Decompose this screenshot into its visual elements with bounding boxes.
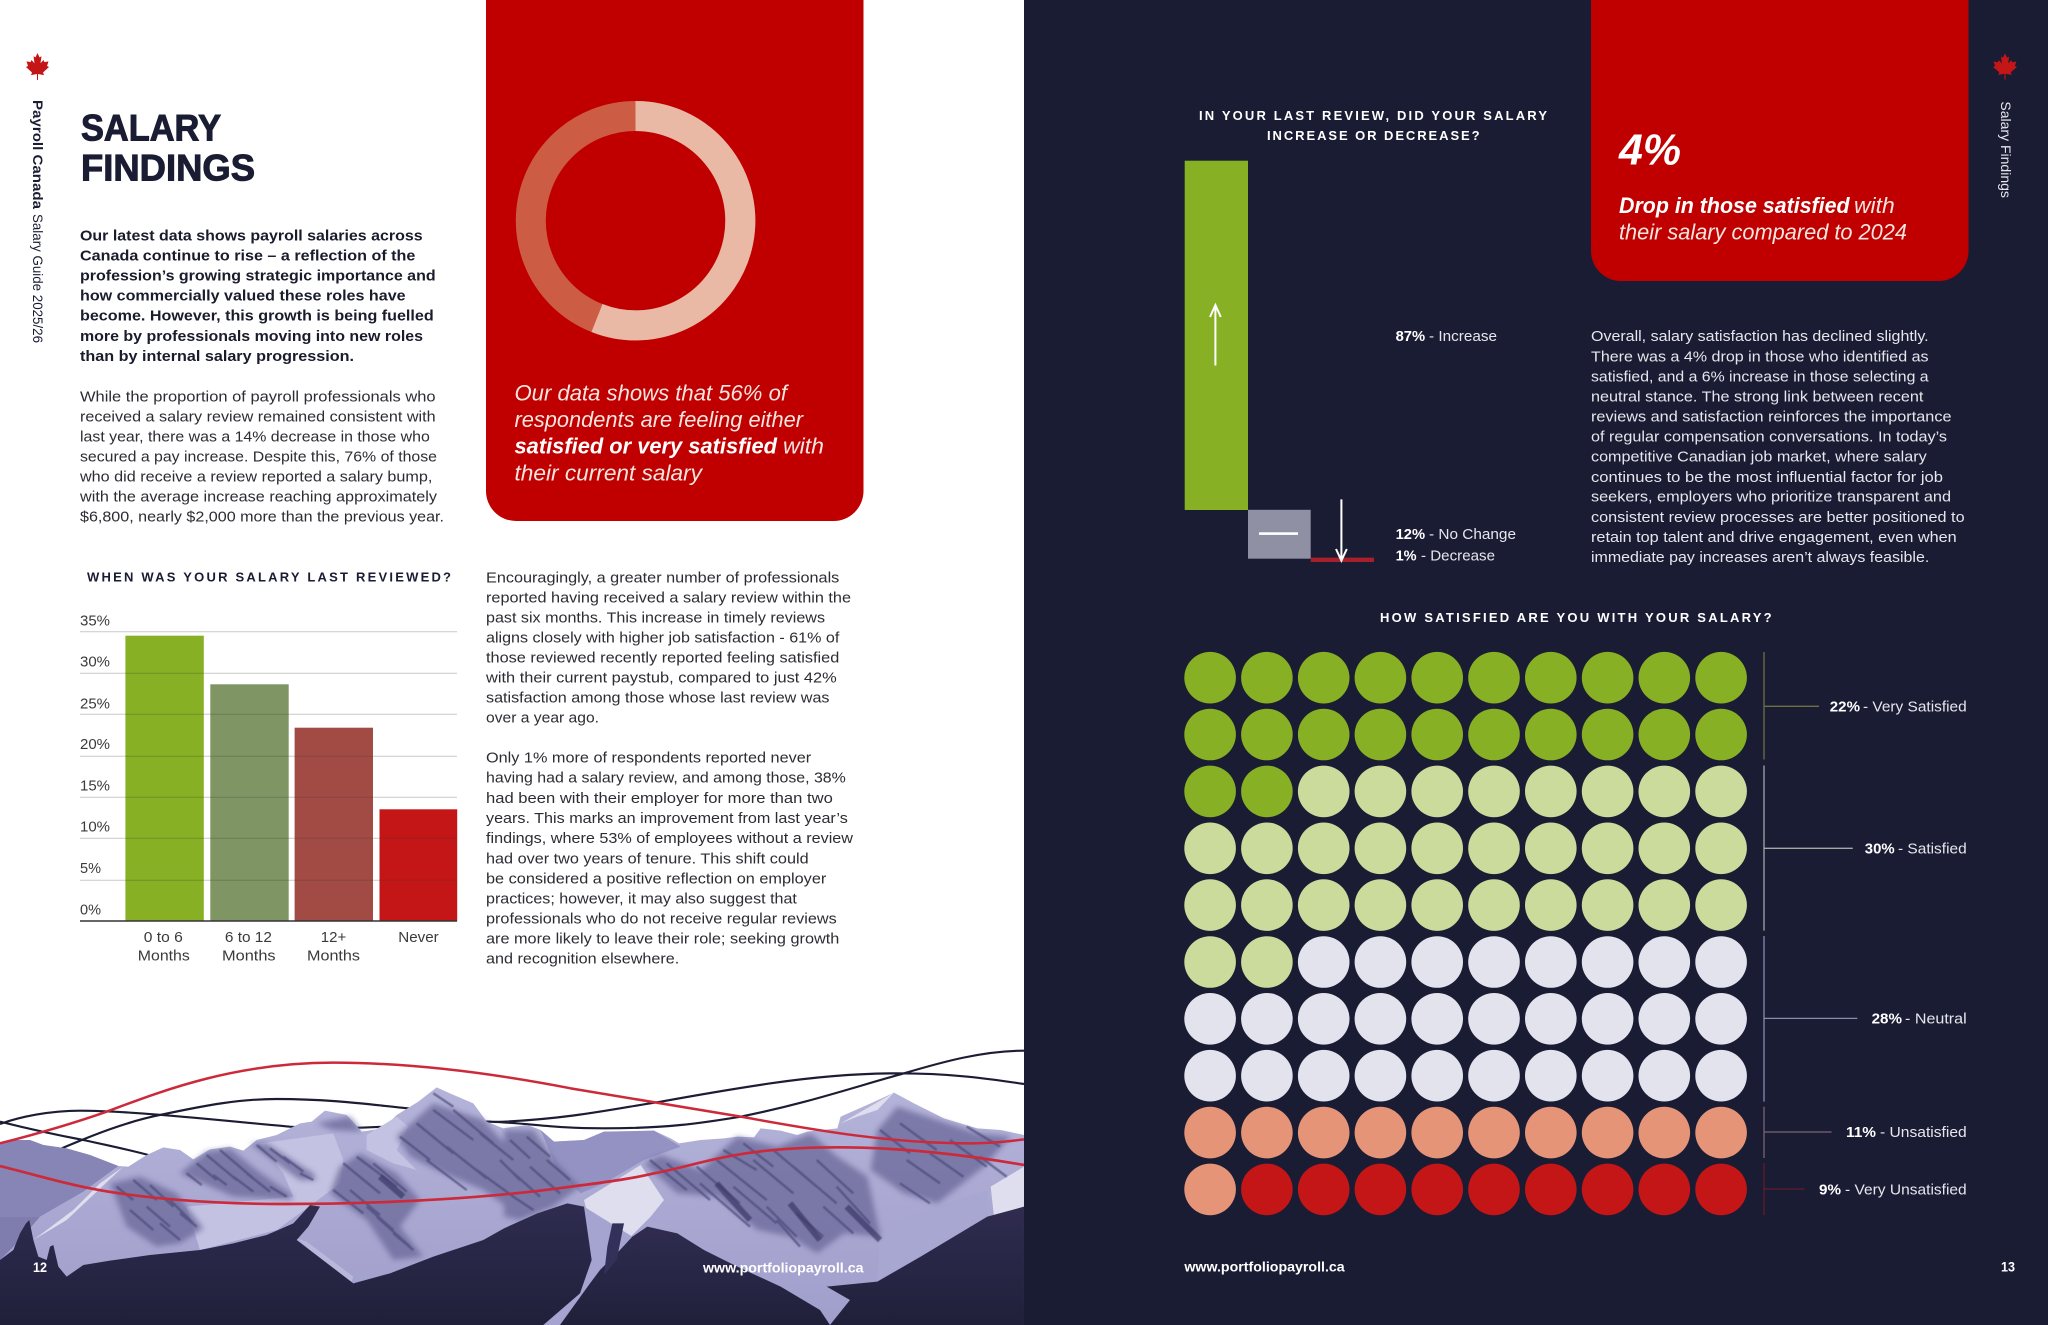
running header left: Salary Guide 2025/26 bbox=[30, 214, 45, 343]
text block: reviews paragraph one: aligns closely with higher job satisfaction - 61% of bbox=[486, 629, 840, 646]
text block: overall satisfaction: of regular compensation conversations. In today’s bbox=[1591, 429, 1947, 446]
text block: intro bold: more by professionals moving into new roles bbox=[80, 328, 423, 345]
bracket: unsatisfied bbox=[1764, 1107, 1832, 1158]
text block: reviews paragraph two: had over two years of tenure. This shift could bbox=[486, 850, 809, 867]
callout text: satisfied or very satisfied bbox=[514, 434, 778, 459]
text block: reviews paragraph one: over a year ago. bbox=[486, 710, 599, 727]
text block: overall satisfaction: satisfied, and a 6% increase in those selecting a bbox=[1591, 369, 1929, 386]
text block: overall satisfaction: competitive Canadian job market, where salary bbox=[1591, 449, 1927, 466]
icon: maple leaf left bbox=[26, 53, 49, 80]
callout text: their current salary bbox=[514, 460, 704, 486]
legend: very unsatisfied: - Very Unsatisfied bbox=[1845, 1181, 1967, 1198]
text block: intro body: secured a pay increase. Despite this, 76% of those bbox=[80, 448, 437, 465]
panel: 4 percent callout bbox=[1591, 0, 1968, 281]
legend: satisfied: 30% bbox=[1865, 840, 1895, 857]
bracket: very unsatisfied bbox=[1764, 1163, 1805, 1215]
text block: overall satisfaction: consistent review processes are better positioned to bbox=[1591, 509, 1965, 526]
icon: maple leaf right bbox=[1993, 54, 2017, 80]
bar chart: salary last reviewed: 25% bbox=[80, 696, 110, 712]
bar chart: salary last reviewed: 30% bbox=[80, 654, 110, 670]
text block: overall satisfaction: neutral stance. The strong link between recent bbox=[1591, 388, 1924, 406]
text block: overall satisfaction bbox=[1591, 328, 1965, 566]
callout text: respondents are feeling either bbox=[514, 407, 805, 432]
footer right bbox=[1183, 1260, 2015, 1274]
text block: reviews paragraph two: findings, where 53% of employees without a review bbox=[486, 830, 853, 847]
text block: overall satisfaction: continues to be the most influential factor for job bbox=[1591, 469, 1943, 486]
text block: reviews paragraph two: had been with their employer for more than two bbox=[486, 790, 833, 807]
bar chart: salary last reviewed: 5% bbox=[80, 861, 101, 877]
heading: how satisfied: HOW SATISFIED ARE YOU WITH YOUR SALARY? bbox=[1380, 610, 1773, 625]
text block: reviews paragraph two: years. This marks an improvement from last year’s bbox=[486, 810, 848, 827]
callout text bbox=[514, 380, 824, 486]
bar chart: salary last reviewed bbox=[80, 614, 457, 964]
bar: no change bbox=[1248, 510, 1311, 559]
legend: unsatisfied: 11% bbox=[1846, 1124, 1876, 1141]
text block: overall satisfaction: There was a 4% drop in those who identified as bbox=[1591, 348, 1929, 365]
bar chart: salary last reviewed: 0 to 6 bbox=[144, 930, 183, 946]
text block: reviews paragraph one: with their current paystub, compared to just 42% bbox=[485, 670, 837, 687]
legend: neutral bbox=[1872, 1010, 1967, 1027]
text block: intro bold: profession’s growing strategic importance and bbox=[80, 268, 436, 284]
running header right: Salary Findings bbox=[1998, 101, 2013, 198]
running header left bbox=[30, 100, 45, 343]
bracket: neutral bbox=[1764, 936, 1857, 1102]
dots: very satisfied 22 bbox=[1184, 652, 1747, 817]
bar chart: salary last reviewed: 10% bbox=[80, 820, 110, 836]
callout text: Our data shows that 56% of bbox=[514, 380, 790, 406]
text block: reviews paragraph two bbox=[486, 750, 853, 967]
heading: salary last reviewed: WHEN WAS YOUR SALARY LAST REVIEWED? bbox=[87, 570, 452, 584]
bar chart: salary last reviewed: Never bbox=[398, 930, 439, 946]
donut chart: 56 percent bbox=[531, 116, 740, 325]
text block: intro bold: how commercially valued these roles have bbox=[80, 288, 406, 304]
text block: intro body: with the average increase reaching approximately bbox=[79, 489, 438, 506]
text block: reviews paragraph one bbox=[485, 569, 851, 727]
bar chart: salary last reviewed: 20% bbox=[80, 737, 110, 753]
text block: intro body: $6,800, nearly $2,000 more than the previous year. bbox=[80, 509, 444, 526]
chart labels bbox=[1396, 328, 1516, 564]
legend: very unsatisfied: 9% bbox=[1819, 1181, 1841, 1198]
icon: minus bbox=[1259, 532, 1298, 535]
legend: satisfied: - Satisfied bbox=[1898, 840, 1967, 857]
chart labels: - No Change bbox=[1429, 526, 1516, 543]
callout text: with bbox=[1854, 193, 1895, 218]
running header left: Payroll Canada bbox=[30, 100, 45, 210]
bar: increase bbox=[1185, 161, 1248, 510]
bar: decrease bbox=[1311, 558, 1374, 562]
text block: overall satisfaction: immediate pay increases aren’t always feasible. bbox=[1591, 549, 1929, 566]
chart labels: 12% bbox=[1396, 526, 1425, 543]
title bbox=[81, 108, 255, 188]
bar chart: salary last reviewed: 15% bbox=[80, 778, 110, 794]
chart labels: - Decrease bbox=[1421, 547, 1495, 564]
text block: reviews paragraph one: satisfaction among those whose last review was bbox=[486, 690, 830, 707]
text block: intro bold bbox=[80, 228, 436, 365]
bar chart: salary last reviewed: Months bbox=[138, 948, 190, 964]
callout text: Drop in those satisfied bbox=[1619, 193, 1850, 218]
chart labels: - Increase bbox=[1429, 328, 1497, 345]
text block: reviews paragraph two: are more likely to leave their role; seeking growth bbox=[486, 930, 839, 947]
dots: neutral 28 bbox=[1184, 936, 1747, 1101]
heading: salary increase or decrease: IN YOUR LAST REVIEW, DID YOUR SALARY bbox=[1199, 108, 1548, 123]
legend: unsatisfied: - Unsatisfied bbox=[1880, 1124, 1967, 1141]
bracket: satisfied bbox=[1764, 766, 1853, 931]
brackets and legend: satisfaction bbox=[1764, 652, 1967, 1215]
panel: satisfaction callout bbox=[486, 0, 864, 521]
right page background bbox=[1024, 0, 2048, 1325]
dots: satisfied 30 bbox=[1184, 766, 1747, 988]
text block: reviews paragraph two: be considered a positive reflection on employer bbox=[486, 870, 826, 887]
bar chart: salary last reviewed: 12+ bbox=[321, 930, 346, 946]
heading: salary increase or decrease bbox=[1199, 108, 1548, 143]
left page background bbox=[0, 0, 1024, 1325]
text block: reviews paragraph one: past six months. This increase in timely reviews bbox=[486, 609, 825, 626]
title: FINDINGS bbox=[81, 148, 255, 188]
text block: intro bold: Our latest data shows payroll salaries across bbox=[80, 228, 423, 244]
callout text: their salary compared to 2024 bbox=[1619, 220, 1907, 245]
text block: reviews paragraph two: having had a salary review, and among those, 38% bbox=[486, 770, 846, 787]
bar chart: salary last reviewed: Months bbox=[307, 948, 360, 964]
text block: overall satisfaction: retain top talent and drive engagement, even when bbox=[1591, 529, 1957, 546]
icon: up arrow bbox=[1210, 305, 1221, 366]
text block: reviews paragraph one: Encouragingly, a greater number of professionals bbox=[486, 569, 839, 586]
callout text: with bbox=[783, 434, 824, 459]
chart: salary change staircase bbox=[1185, 161, 1374, 562]
text block: reviews paragraph two: professionals who do not receive regular reviews bbox=[486, 910, 837, 927]
text block: reviews paragraph two: and recognition elsewhere. bbox=[486, 950, 679, 967]
legend: satisfied bbox=[1865, 840, 1967, 857]
text block: intro body: last year, there was a 14% decrease in those who bbox=[80, 428, 430, 445]
legend: neutral: 28% bbox=[1872, 1010, 1902, 1027]
legend: neutral: - Neutral bbox=[1905, 1010, 1967, 1027]
chart: satisfaction dot grid bbox=[1184, 652, 1747, 1215]
text block: overall satisfaction: Overall, salary satisfaction has declined slightly. bbox=[1591, 328, 1929, 345]
footer left: www.portfoliopayroll.ca bbox=[702, 1260, 864, 1276]
chart labels: 1% bbox=[1396, 547, 1417, 564]
legend: unsatisfied bbox=[1846, 1124, 1967, 1141]
legend: very satisfied: 22% bbox=[1830, 698, 1860, 715]
text block: intro bold: become. However, this growth is being fuelled bbox=[80, 308, 434, 325]
text block: overall satisfaction: seekers, employers who prioritize transparent and bbox=[1591, 489, 1951, 506]
text block: intro body: While the proportion of payroll professionals who bbox=[80, 388, 436, 405]
text block: reviews paragraph two: Only 1% more of respondents reported never bbox=[486, 750, 811, 767]
dots: unsatisfied 11 bbox=[1184, 1107, 1747, 1215]
text block: reviews paragraph two: practices; however, it may also suggest that bbox=[486, 890, 798, 907]
footer left: 12 bbox=[33, 1260, 47, 1275]
footer right: 13 bbox=[2001, 1260, 2015, 1274]
stat: 4% bbox=[1618, 126, 1681, 175]
bar chart: salary last reviewed: 0% bbox=[80, 902, 101, 918]
legend: very satisfied: - Very Satisfied bbox=[1863, 698, 1967, 715]
bar chart: salary last reviewed: 35% bbox=[80, 614, 110, 630]
text block: intro body: received a salary review remained consistent with bbox=[80, 408, 436, 425]
chart labels: 87% bbox=[1396, 328, 1425, 345]
bar chart: salary last reviewed: 6 to 12 bbox=[225, 930, 272, 946]
text block: reviews paragraph one: those reviewed recently reported feeling satisfied bbox=[486, 649, 839, 666]
text block: intro bold: than by internal salary progression. bbox=[80, 348, 354, 365]
footer left bbox=[33, 1260, 864, 1276]
text block: overall satisfaction: reviews and satisfaction reinforces the importance bbox=[1591, 408, 1952, 425]
text block: intro bold: Canada continue to rise – a reflection of the bbox=[80, 248, 415, 264]
callout text bbox=[1619, 193, 1907, 245]
bar chart: salary last reviewed: Months bbox=[222, 948, 276, 964]
heading: salary increase or decrease: INCREASE OR DECREASE? bbox=[1267, 128, 1481, 143]
bracket: very satisfied bbox=[1764, 652, 1819, 760]
dots: very unsatisfied 9 bbox=[1241, 1164, 1747, 1215]
footer right: www.portfoliopayroll.ca bbox=[1183, 1260, 1345, 1274]
text block: reviews paragraph one: reported having received a salary review within the bbox=[486, 589, 851, 606]
text block: intro body: who did receive a review reported a salary bump, bbox=[79, 469, 432, 486]
title: SALARY bbox=[81, 108, 221, 148]
illustration: mountain range with wavy lines bbox=[0, 1051, 1024, 1325]
icon: down arrow bbox=[1336, 499, 1347, 561]
text block: intro body bbox=[79, 388, 444, 526]
